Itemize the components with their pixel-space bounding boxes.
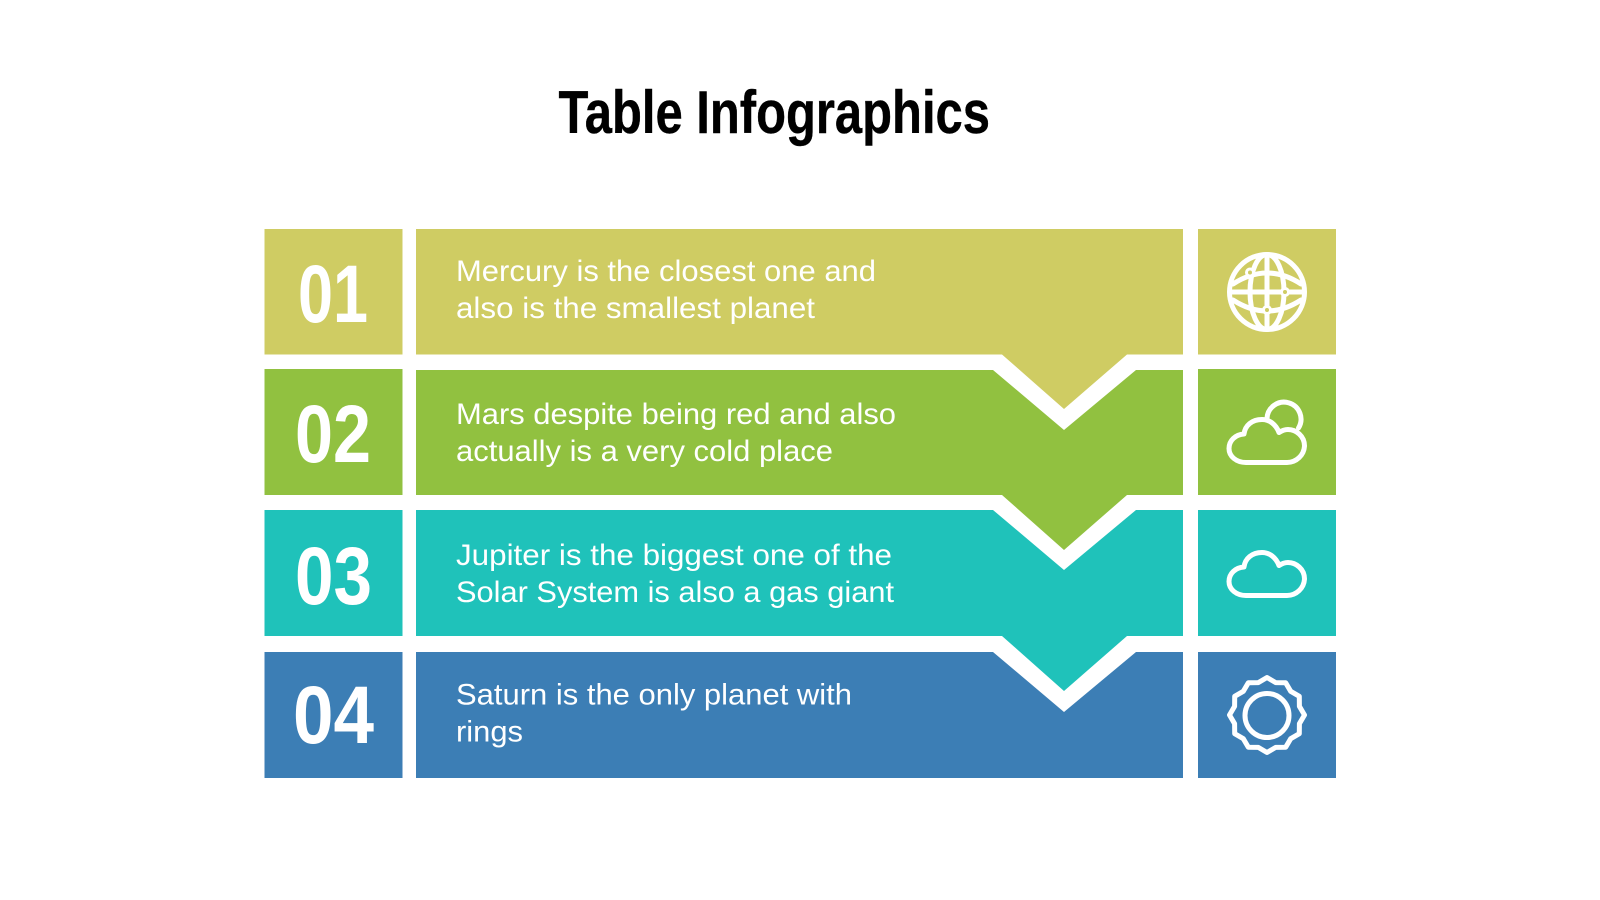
row 4: Saturn bbox=[264, 652, 1336, 778]
text: Mars: actually is a very cold place bbox=[456, 435, 833, 468]
row 1: Mercury bbox=[264, 229, 1336, 409]
chevron band 4 bbox=[416, 652, 1183, 778]
text: Saturn bbox=[456, 678, 852, 748]
number box 01: 01 bbox=[298, 249, 368, 340]
text: Mars: Mars despite being red and also bbox=[456, 398, 896, 431]
row 2: Mars bbox=[264, 369, 1336, 550]
icon: sun badge bbox=[1230, 678, 1304, 752]
text: Jupiter: Jupiter is the biggest one of the bbox=[456, 539, 892, 572]
chevron band 3 bbox=[416, 510, 1183, 691]
text: Mercury: also is the smallest planet bbox=[456, 292, 816, 325]
text: Saturn: rings bbox=[456, 716, 523, 748]
icon: globe bbox=[1230, 254, 1304, 330]
text: Jupiter bbox=[456, 539, 895, 609]
text: Jupiter: Solar System is also a gas giant bbox=[456, 576, 895, 609]
chevron band 1 bbox=[416, 229, 1183, 409]
number box 01 bbox=[264, 229, 402, 354]
icon box 3 bbox=[1198, 510, 1336, 636]
chevron band 2 bbox=[416, 370, 1183, 550]
icon: cloud bbox=[1229, 552, 1304, 596]
row 3: Jupiter bbox=[264, 510, 1336, 691]
text: Mercury bbox=[456, 255, 876, 325]
text: Mars bbox=[456, 398, 896, 468]
number box 04 bbox=[264, 652, 402, 778]
number box 02 bbox=[264, 369, 402, 495]
number box 03 bbox=[264, 510, 402, 636]
number box 04: 04 bbox=[293, 670, 374, 761]
number box 02: 02 bbox=[295, 389, 371, 480]
icon: cloud with sun bbox=[1229, 402, 1304, 463]
title: Table Infographics bbox=[558, 79, 990, 146]
text: Mercury: Mercury is the closest one and bbox=[456, 255, 876, 288]
icon box 2 bbox=[1198, 369, 1336, 495]
icon box 1 bbox=[1198, 229, 1336, 354]
text: Saturn: Saturn is the only planet with bbox=[456, 678, 852, 712]
icon box 4 bbox=[1198, 652, 1336, 778]
number box 03: 03 bbox=[295, 531, 372, 622]
